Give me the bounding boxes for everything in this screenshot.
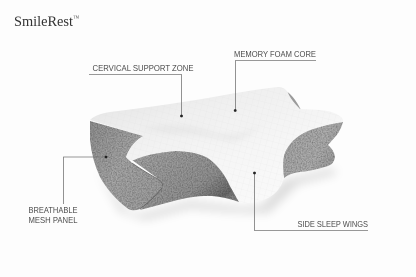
pillow shadow xyxy=(96,168,336,220)
panel seam xyxy=(132,163,162,209)
back right mesh corner xyxy=(284,90,301,110)
pillow illustration xyxy=(90,87,343,220)
neck contour shading xyxy=(140,124,262,141)
label: memory foam core: MEMORY FOAM CORE xyxy=(234,49,316,59)
callout: memory foam core xyxy=(234,49,316,112)
right mesh wing xyxy=(283,122,343,178)
callout: side sleep wings xyxy=(253,172,368,230)
front mesh panel xyxy=(132,151,239,210)
callout: breathable mesh panel xyxy=(28,156,107,225)
left mesh panel xyxy=(90,121,162,210)
label: side sleep wings: SIDE SLEEP WINGS xyxy=(298,219,368,229)
label: cervical support zone: CERVICAL SUPPORT ZONE xyxy=(92,63,194,73)
label: breathable mesh panel: MESH PANEL xyxy=(28,215,78,225)
label: breathable mesh panel: BREATHABLE xyxy=(28,205,78,215)
callout: cervical support zone xyxy=(89,63,194,117)
title: brand name: TM xyxy=(74,16,80,20)
white memory foam top surface xyxy=(90,87,343,203)
title: brand name: SmileRest xyxy=(14,14,73,30)
